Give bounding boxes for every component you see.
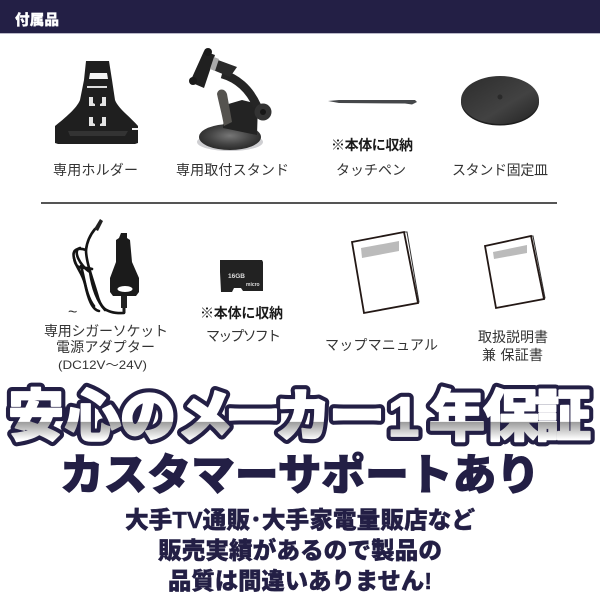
subheadline: customer support: カスタマーサポートあり — [60, 452, 540, 500]
body text — [125, 507, 476, 594]
body text: 大手TV通販･大手家電量販店など — [125, 507, 476, 533]
header bar — [0, 0, 600, 34]
icon: suction stand — [189, 48, 272, 151]
label: タッチペン — [336, 162, 406, 178]
headline: warranty: 安心のメーカー1年保証 — [8, 385, 591, 448]
item: touch pen — [328, 100, 417, 178]
item: instruction and warranty — [478, 236, 548, 363]
tilde mark: ~ — [68, 304, 77, 321]
item: map manual — [325, 232, 438, 353]
label: スタンド固定皿 — [452, 162, 548, 178]
label: 専用シガーソケット — [44, 323, 168, 339]
icon: holder — [55, 61, 138, 144]
body text: 品質は間違いありません! — [168, 568, 432, 594]
label: 電源アダプター — [56, 339, 155, 355]
label: 兼 保証書 — [482, 347, 543, 363]
header title: 付属品 — [15, 11, 59, 29]
note: ※本体に収納 — [331, 137, 413, 153]
icon: booklet — [485, 236, 545, 308]
item: map software — [200, 260, 283, 344]
icon: car charger — [74, 219, 139, 313]
icon: microSD card: micro — [246, 282, 260, 288]
item: car adapter — [44, 219, 168, 372]
label: 専用取付スタンド — [176, 162, 289, 178]
label: マップマニュアル — [325, 337, 438, 353]
label: マップソフト — [206, 328, 281, 344]
label: 専用ホルダー — [53, 162, 138, 178]
body text: 販売実績があるので製品の — [158, 536, 442, 564]
item: holder — [53, 61, 138, 178]
icon: plate — [461, 76, 539, 126]
icon: microSD card — [220, 260, 263, 292]
note: ※本体に収納 — [200, 305, 283, 321]
voltage: (DC12V～24V) — [58, 358, 147, 372]
icon: microSD card: 16GB — [228, 273, 245, 280]
icon: touch pen — [328, 100, 417, 104]
item: stand — [176, 48, 289, 178]
label: 取扱説明書 — [478, 329, 548, 345]
icon: manual — [352, 232, 419, 313]
item: fixing plate — [452, 76, 548, 178]
headline: warranty: 安心のメーカー1年保証 — [8, 385, 591, 448]
